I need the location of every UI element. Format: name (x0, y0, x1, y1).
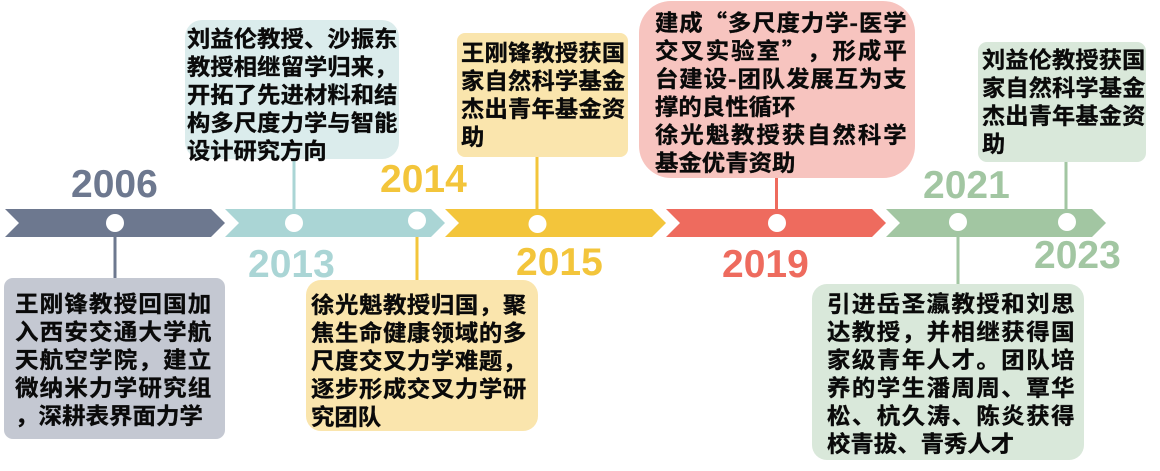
stem: 2013 (292, 158, 296, 210)
text: 2013 note: 刘益伦教授、沙振东 (187, 22, 397, 54)
stem: 2014 (416, 228, 418, 285)
year: 2015: 2015 (516, 241, 603, 284)
text: 2013 note: 构多尺度力学与智能 (187, 106, 397, 138)
arrow: 2015 segment (445, 209, 666, 237)
panel: 2006 note (4, 278, 225, 439)
text: 2015 note: 家自然科学基金 (461, 64, 625, 96)
text: 2019 note: 台建设-团队发展互为支 (655, 62, 907, 94)
text: 2013 note: 教授相继留学归来， (187, 50, 397, 82)
text: 2021 note: 达教授，并相继获得国 (827, 315, 1075, 347)
panel: 2023 note (978, 42, 1146, 162)
text: 2014 note: 逐步形成交叉力学研 (311, 372, 526, 404)
panel: 2014 note (306, 280, 538, 431)
text: 2006 note: 天航空学院，建立 (15, 343, 211, 375)
text: 2019 note (655, 6, 907, 178)
year: 2023: 2023 (1034, 234, 1121, 277)
text: 2014 note: 徐光魁教授归国，聚 (311, 288, 526, 320)
panel: 2013 note (185, 20, 399, 159)
stem: 2019 (775, 177, 778, 215)
marker: 2019 (768, 214, 786, 232)
text: 2015 note: 杰出青年基金资 (461, 92, 625, 124)
text: 2006 note: 王刚锋教授回国加 (15, 287, 211, 319)
year: 2021: 2021 (923, 164, 1010, 207)
text: 2023 note: 杰出青年基金资 (982, 99, 1145, 131)
text: 2006 note: 微纳米力学研究组 (15, 371, 211, 403)
text: 2013 note: 设计研究方向 (187, 134, 327, 166)
text: 2006 note: 入西安交通大学航 (15, 315, 211, 347)
text: 2019 note: 交叉实验室”，形成平 (655, 34, 907, 66)
text: 2015 note: 助 (461, 120, 484, 152)
text: 2006 note (15, 287, 211, 431)
marker: 2013 (285, 214, 303, 232)
text: 2023 note (982, 43, 1146, 159)
arrow: 2013-2014 segment (225, 209, 445, 237)
marker: 2006 (106, 214, 124, 232)
text: 2014 note: 焦生命健康领域的多 (311, 316, 526, 348)
text: 2015 note (461, 36, 626, 152)
stem: 2021 (956, 236, 960, 285)
arrow: 2019 segment (666, 209, 886, 237)
text: 2023 note: 家自然科学基金 (982, 71, 1145, 103)
text: 2013 note (187, 22, 397, 166)
text: 2014 note (311, 288, 526, 432)
year: 2014: 2014 (380, 158, 467, 201)
year: 2006: 2006 (71, 163, 158, 206)
text: 2021 note: 家级青年人才。团队培 (827, 343, 1075, 375)
text: 2019 note: 徐光魁教授获自然科学 (655, 118, 907, 150)
text: 2014 note: 尺度交叉力学难题， (311, 344, 526, 376)
text: 2019 note: 建成“多尺度力学-医学 (655, 6, 907, 38)
panel: 2015 note (457, 33, 628, 157)
text: 2023 note: 助 (982, 127, 1005, 159)
stem: 2015 (536, 157, 538, 215)
year: 2019: 2019 (722, 243, 809, 286)
year: 2013: 2013 (248, 243, 335, 286)
text: 2021 note: 松、杭久涛、陈炎获得 (827, 399, 1075, 431)
text: 2013 note: 开拓了先进材料和结 (187, 78, 397, 110)
text: 2014 note: 究团队 (311, 400, 381, 432)
arrow: 2006 segment (5, 209, 225, 237)
panel: 2019 note (639, 1, 915, 178)
text: 2006 note: ，深耕表界面力学 (15, 399, 203, 431)
text: 2021 note: 引进岳圣瀛教授和刘思 (827, 287, 1075, 319)
text: 2021 note: 校青拔、青秀人才 (827, 427, 1014, 459)
arrow: 2021-2023 segment (886, 209, 1106, 237)
panel: 2021 note (812, 284, 1084, 460)
text: 2019 note: 基金优青资助 (655, 146, 795, 178)
stem: 2023 (1064, 161, 1068, 215)
marker: 2014 (408, 212, 426, 230)
text: 2015 note: 王刚锋教授获国 (461, 36, 625, 68)
marker: 2023 (1058, 213, 1076, 231)
marker: 2015 (528, 215, 546, 233)
text: 2019 note: 撑的良性循环 (655, 90, 795, 122)
stem: 2006 (114, 236, 116, 279)
text: 2021 note (827, 287, 1075, 459)
marker: 2021 (949, 213, 967, 231)
text: 2023 note: 刘益伦教授获国 (982, 43, 1145, 75)
text: 2021 note: 养的学生潘周周、覃华 (827, 371, 1075, 403)
